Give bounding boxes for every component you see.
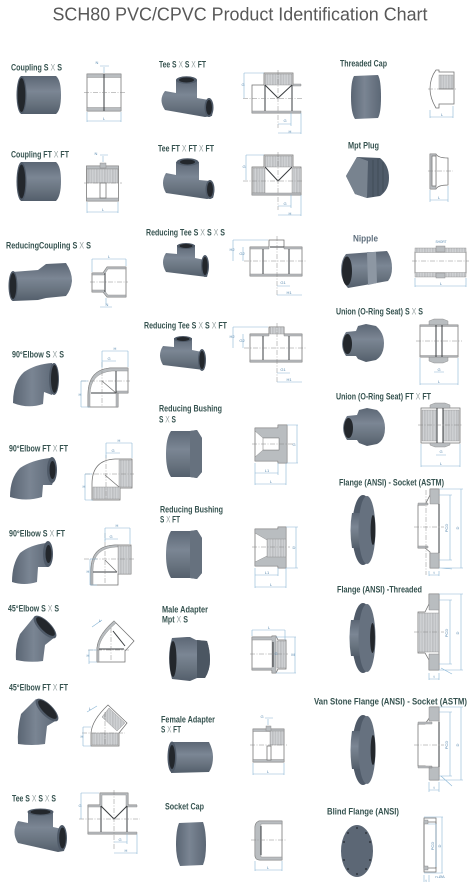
drawing: H [116, 523, 119, 528]
drawing: G [107, 356, 111, 361]
label: Socket Cap [165, 802, 204, 812]
photo [350, 603, 376, 673]
photo [169, 637, 210, 681]
label: Coupling S X S [11, 62, 62, 72]
drawing [84, 523, 134, 585]
photo [166, 530, 202, 579]
label: 90°Elbow FT X FT [9, 444, 68, 454]
label: S X FT [160, 514, 180, 524]
drawing: PCD [444, 741, 449, 749]
panel: 45 Elbow S X S [8, 604, 134, 664]
label: Tee S X S X S [12, 794, 56, 804]
label: Reducing Bushing [159, 404, 222, 414]
drawing: G1 [280, 280, 286, 285]
panel: 90 Elbow S X FT [9, 523, 134, 585]
photo [10, 457, 57, 500]
drawing: L [438, 379, 441, 384]
drawing: H [81, 734, 84, 739]
photo [160, 336, 206, 371]
panel: Reducing Bushing S X S [159, 404, 298, 485]
label: Tee S X S X FT [159, 60, 206, 70]
drawing [414, 489, 463, 576]
panel: Tee S X S X S [12, 790, 140, 854]
drawing: L1 [265, 570, 270, 575]
label: S X S [159, 414, 176, 424]
drawing: L [438, 195, 441, 200]
panel: Reducing Tee S X S X FT [144, 320, 306, 383]
drawing: L [270, 479, 273, 484]
panel: Blind Flange [327, 806, 445, 883]
drawing: t [433, 785, 435, 790]
drawing: L [103, 116, 106, 121]
label: Flange (ANSI) -Threaded [337, 584, 422, 594]
drawing: H [83, 484, 86, 489]
drawing: L [441, 112, 444, 117]
drawing: L [440, 461, 443, 466]
drawing [252, 425, 298, 485]
label: 90°Elbow S X FT [9, 528, 65, 538]
label: Union (O-Ring Seat) S X S [336, 306, 423, 316]
drawing: n-ØA [435, 874, 445, 879]
drawing: PCD [430, 842, 435, 850]
drawing: G2 [239, 251, 245, 256]
drawing: H [87, 569, 90, 574]
drawing [81, 705, 127, 748]
drawing: N [106, 302, 109, 307]
drawing: H [118, 438, 121, 443]
drawing: H [289, 129, 292, 134]
drawing: L1 [265, 468, 270, 473]
drawing [252, 527, 298, 588]
panel: 45 Elbow FT X FT [9, 682, 127, 748]
drawing: D [455, 743, 460, 746]
panel: Mpt Plug [346, 140, 453, 202]
drawing: L [89, 706, 92, 711]
panel: Threaded Cap [340, 58, 456, 119]
label [160, 504, 223, 524]
panel: Reducing Coupling S X S [6, 240, 128, 307]
drawing [418, 403, 463, 467]
panel: 90 Elbow S X S [12, 346, 130, 407]
drawing: G [109, 534, 113, 539]
panel: Tee FT X FT X FT [158, 144, 302, 216]
photo [163, 243, 209, 277]
drawing [229, 236, 306, 296]
photo [162, 76, 214, 117]
drawing: L [268, 625, 271, 630]
label: Reducing Tee S X S X FT [144, 320, 227, 330]
panel: Male Adapter [162, 604, 296, 681]
drawing [241, 70, 302, 134]
drawing: G [292, 442, 296, 447]
label: Reducing Bushing [160, 504, 223, 514]
drawing: M [291, 652, 295, 657]
photo [341, 251, 392, 288]
drawing: G [274, 651, 278, 656]
photo [163, 158, 214, 199]
photo [13, 363, 59, 406]
drawing: H [114, 346, 117, 351]
photo [16, 162, 61, 201]
label: 90°Elbow S X S [12, 350, 64, 360]
drawing: G [242, 164, 246, 169]
drawing: L [267, 865, 270, 870]
panel: Reducing Bushing S X FT [160, 504, 298, 588]
drawing: G [437, 367, 441, 372]
drawing: N [96, 60, 99, 65]
drawing [87, 618, 134, 664]
title: SCH80 PVC/CPVC Product Identification Chart [52, 4, 428, 24]
drawing: D [293, 545, 296, 550]
drawing: G [439, 449, 443, 454]
drawing: H2 [229, 334, 235, 339]
label: Flange (ANSI) - Socket (ASTM) [339, 478, 444, 488]
label: Threaded Cap [340, 58, 387, 68]
photo [8, 263, 72, 301]
label: Female Adapter [161, 714, 215, 724]
label: Blind Flange (ANSI) [327, 806, 399, 816]
drawing [79, 346, 130, 407]
panel: Reducing Tee S X S X S [146, 228, 306, 296]
drawing: D [455, 631, 460, 634]
panel: Flange Threaded [337, 584, 463, 680]
photo [14, 808, 67, 852]
drawing: L [440, 281, 443, 286]
drawing [416, 319, 462, 385]
panel: 90 Elbow FT X FT [9, 438, 134, 500]
drawing: G [283, 118, 287, 123]
photo [16, 76, 61, 114]
label [161, 714, 215, 734]
panel: Van Stone Flange [314, 696, 467, 792]
label [159, 404, 222, 424]
drawing: L [108, 254, 111, 259]
drawing: t [433, 570, 435, 575]
panel: Socket Cap [165, 802, 286, 871]
drawing: H1 [286, 290, 292, 295]
label: S X FT [161, 724, 181, 734]
drawing [412, 240, 469, 287]
label: Reducing Tee S X S X S [146, 228, 225, 238]
drawing: H [289, 211, 292, 216]
drawing: G1 [280, 367, 286, 372]
drawing [250, 714, 287, 775]
drawing: D [437, 844, 442, 847]
photo [346, 157, 389, 198]
label [162, 604, 208, 624]
drawing: PCD [444, 524, 449, 532]
drawing [78, 790, 140, 854]
drawing [250, 625, 296, 673]
panel: Union FT X FT [336, 392, 463, 467]
drawing [424, 817, 445, 883]
label: 45°Elbow S X S [8, 604, 59, 614]
drawing: H2 [229, 247, 235, 252]
panel: Coupling S X S [11, 60, 125, 122]
drawing [229, 323, 306, 383]
drawing: SHORT [435, 240, 447, 244]
drawing [414, 594, 463, 680]
photo [18, 695, 62, 745]
label: Male Adapter [162, 604, 208, 614]
drawing: H1 [286, 377, 292, 382]
drawing: G2 [239, 338, 245, 343]
label: Mpt Plug [348, 140, 379, 150]
photo [176, 822, 206, 866]
drawing: G [260, 714, 264, 719]
drawing: G [118, 837, 122, 842]
label: Coupling FT X FT [11, 150, 69, 160]
drawing [242, 152, 302, 216]
panel: Coupling FT X FT [11, 150, 122, 213]
drawing: G [111, 448, 115, 453]
drawing [414, 707, 463, 792]
drawing: D [455, 526, 460, 529]
photo [350, 495, 376, 565]
drawing: PCD [444, 629, 449, 637]
photo [350, 715, 376, 785]
drawing [84, 60, 125, 122]
drawing: G [283, 201, 287, 206]
drawing: L [99, 618, 102, 623]
panel: Tee S X S X FT [159, 60, 302, 134]
label: 45°Elbow FT X FT [9, 682, 68, 692]
photo [12, 541, 53, 584]
label: Tee FT X FT X FT [158, 144, 214, 154]
label: Nipple [353, 234, 378, 244]
drawing: N [95, 151, 98, 156]
label: ReducingCoupling S X S [6, 240, 91, 250]
drawing: G [241, 82, 245, 87]
drawing: t [425, 878, 427, 883]
label: Mpt X S [162, 614, 188, 624]
drawing: L [102, 207, 105, 212]
panel: Nipple [341, 234, 469, 288]
photo [351, 75, 381, 119]
photo [341, 825, 373, 877]
drawing: L [270, 582, 273, 587]
photo [342, 324, 384, 362]
panel: Union S X S [336, 306, 462, 385]
photo [16, 612, 60, 662]
drawing [84, 151, 122, 213]
drawing: t [433, 674, 435, 679]
label: Union (O-Ring Seat) FT X FT [336, 392, 431, 402]
drawing: H [87, 653, 90, 658]
drawing: G [78, 803, 82, 808]
drawing [83, 438, 134, 500]
panel: Flange Socket [339, 478, 463, 576]
drawing: L [267, 769, 270, 774]
panel: Female Adapter [161, 714, 287, 775]
photo [166, 430, 202, 478]
drawing: H [79, 392, 82, 397]
drawing [90, 254, 128, 307]
photo [168, 742, 213, 773]
photo [343, 408, 385, 446]
drawing: H [125, 848, 128, 853]
